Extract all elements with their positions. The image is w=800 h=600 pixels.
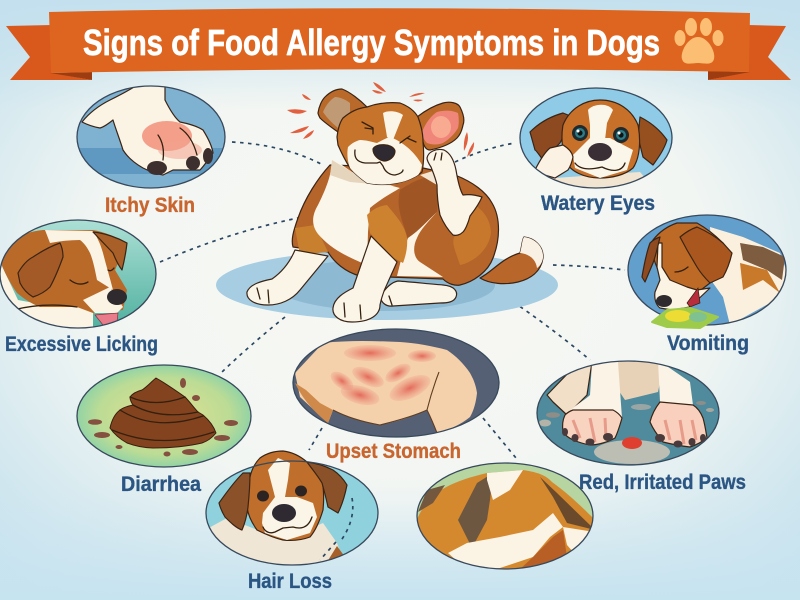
left front leg: [247, 250, 328, 305]
label: Red, Irritated Paws: [579, 471, 746, 494]
icon: paw: [674, 18, 724, 64]
label: Hair Loss: [248, 570, 332, 593]
eyes and mouth: [355, 122, 416, 175]
panel: hair loss: [205, 451, 378, 593]
title banner: [6, 8, 791, 80]
white belly stripe: [397, 212, 443, 277]
ribbon tail left: [6, 25, 92, 80]
tail: [480, 237, 543, 284]
head: [337, 103, 424, 184]
right front leg: [333, 236, 397, 322]
right ear: [417, 102, 464, 150]
nose: [373, 145, 395, 161]
white chest: [313, 158, 400, 265]
panel: red irritated paws: [535, 358, 746, 494]
panel: vomiting: [625, 212, 790, 355]
label: Diarrhea: [121, 473, 201, 496]
toes: [257, 288, 392, 319]
left ear: [318, 89, 367, 132]
raised leg: [427, 149, 482, 235]
connector lines: [160, 142, 625, 458]
ribbon body: [49, 8, 750, 73]
vomit splash: [652, 308, 718, 328]
panel: watery eyes: [515, 85, 675, 215]
title: Signs of Food Allergy Symptoms in Dogs: [83, 22, 660, 63]
panel: excessive licking: [0, 218, 160, 356]
main dog illustration: [216, 82, 558, 322]
panel: itchy skin: [70, 85, 230, 217]
label: Itchy Skin: [105, 194, 195, 217]
paw toes on raised leg: [434, 153, 442, 160]
panel: upset stomach: [290, 325, 500, 463]
label: Vomiting: [667, 332, 749, 355]
muzzle: [347, 137, 422, 184]
label: Excessive Licking: [5, 333, 158, 356]
scratch marks: [287, 82, 474, 157]
poop pile: [110, 378, 216, 448]
panel: diarrhea: [77, 365, 251, 496]
body: [292, 165, 498, 285]
ribbon tail right: [708, 25, 791, 80]
shoulder patch: [367, 205, 407, 263]
muzzle: [655, 243, 710, 310]
lighter body patch: [295, 225, 328, 255]
label: Upset Stomach: [326, 440, 461, 463]
panel: dog back with hair patch: [415, 460, 595, 575]
back leg paw: [381, 281, 457, 306]
label: Watery Eyes: [541, 192, 655, 215]
head stripe: [383, 111, 403, 140]
floor shadow: [216, 250, 558, 320]
